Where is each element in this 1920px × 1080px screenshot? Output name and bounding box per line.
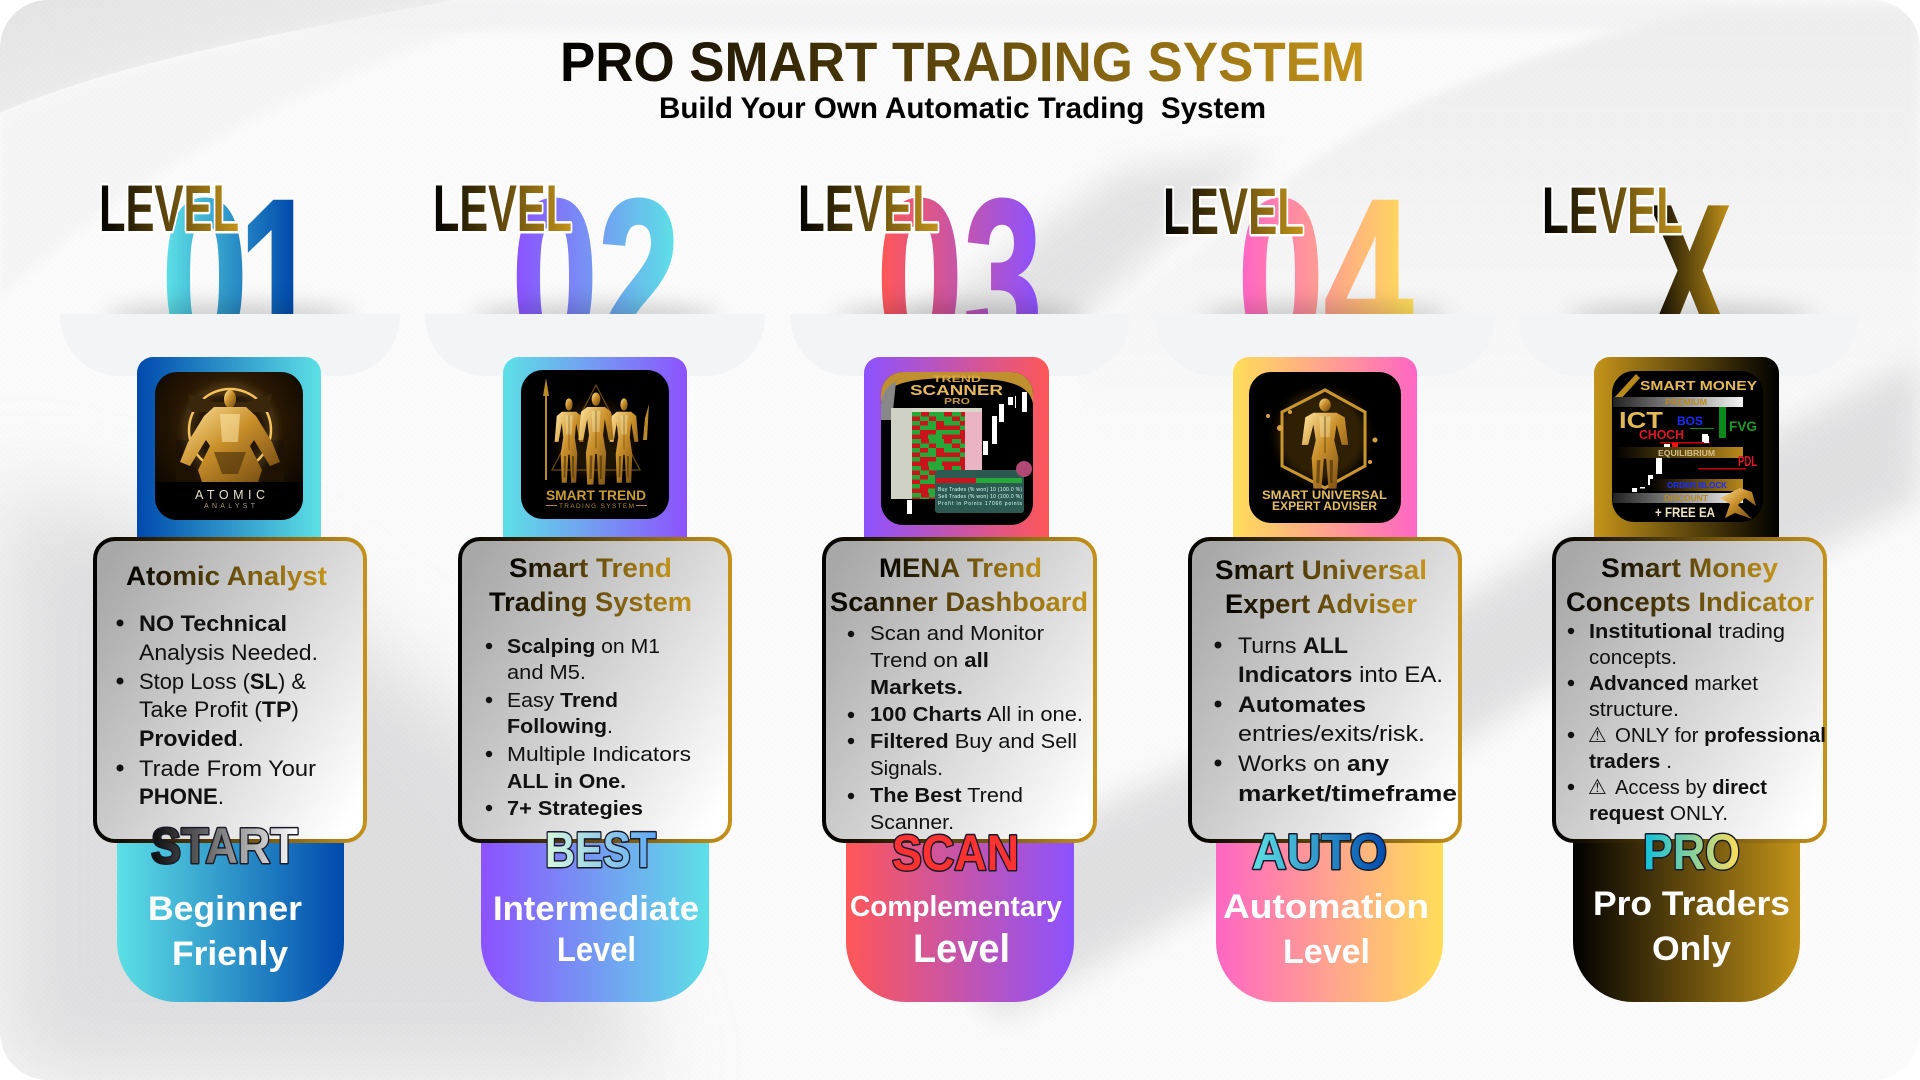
- level x column: [1544, 185, 1827, 1002]
- feature list: traders .: [1589, 751, 1672, 773]
- panel title: Concepts Indicator: [1566, 587, 1814, 617]
- pill: intermediate: Level: [557, 931, 636, 969]
- big number 03: [882, 198, 1038, 314]
- icon: smart money: FVG: [1729, 418, 1757, 434]
- feature list: 7+ Strategies: [507, 797, 643, 820]
- big number 01: [166, 198, 294, 314]
- panel title: MENA Trend: [879, 553, 1042, 583]
- level label: LEVEL: [798, 171, 939, 245]
- feature list: NO Technical: [139, 611, 287, 636]
- big number 04: 0: [1238, 154, 1324, 402]
- icon: smart universal: SMART UNIVERSAL: [1262, 490, 1387, 502]
- level 04 column: [1164, 186, 1462, 1002]
- big number 03: 0: [877, 154, 963, 402]
- feature list: Advanced market: [1589, 673, 1758, 695]
- panel title: [489, 553, 692, 617]
- big number 01: 1: [239, 154, 319, 402]
- feature list: ONLY for professional: [1615, 725, 1826, 747]
- shelf shadow: [838, 294, 1082, 314]
- level label: LEVEL: [99, 171, 239, 245]
- pill: intermediate: Intermediate: [493, 890, 699, 928]
- pill: complementary: Level: [913, 927, 1010, 971]
- panel: mena trend: [824, 539, 1095, 841]
- feature list: request ONLY.: [1589, 803, 1728, 825]
- panel title: Smart Universal: [1215, 555, 1427, 585]
- panel title: Atomic Analyst: [126, 561, 327, 591]
- feature list: PHONE.: [139, 784, 224, 809]
- shelf: [60, 314, 400, 376]
- tag: best: BEST: [545, 822, 656, 878]
- tag: auto: AUTO: [1252, 824, 1387, 880]
- big number 02: 2: [598, 154, 680, 402]
- image card: [864, 357, 1049, 557]
- icon: smart money: + FREE EA: [1655, 504, 1715, 520]
- panel: smart universal: [1190, 539, 1460, 841]
- big letter x: X: [1648, 165, 1731, 383]
- level label: LEVEL: [1542, 173, 1683, 247]
- feature list: Stop Loss (SL) &: [139, 669, 306, 694]
- pill: complementary: Complementary: [850, 891, 1062, 923]
- feature list: Multiple Indicators: [507, 743, 691, 766]
- panel: atomic analyst: [95, 539, 365, 841]
- pill: pro traders: [1573, 820, 1800, 1002]
- icon: trend scanner dashboard: Buy Trades (% won) 10 (100.0 %): [938, 487, 1022, 493]
- shelf shadow: [1569, 295, 1811, 314]
- feature list: ⚠: [1588, 775, 1607, 799]
- feature list: [486, 635, 691, 820]
- subtitle: Build Your Own Automatic Trading System: [659, 92, 1266, 125]
- icon: trend scanner dashboard: Profit in Points 17066 points: [938, 501, 1022, 507]
- pill: beginner friendly: Beginner: [148, 890, 302, 928]
- feature list: Works on any: [1238, 751, 1390, 776]
- panel title: [1215, 555, 1427, 619]
- feature list: 100 Charts All in one.: [870, 703, 1083, 726]
- icon: smart money: SMART MONEY: [1640, 378, 1757, 393]
- feature list: concepts.: [1589, 647, 1677, 669]
- level 03 column: [800, 186, 1097, 1002]
- big number 02: 0: [512, 154, 598, 402]
- feature list: [1214, 633, 1457, 806]
- feature list: Filtered Buy and Sell: [870, 730, 1077, 753]
- shelf shadow: [1202, 294, 1448, 314]
- feature list: Provided.: [139, 726, 244, 751]
- icon: smart trend: SMART TREND: [546, 487, 646, 503]
- image card: [137, 357, 321, 557]
- panel title: Smart Money: [1601, 553, 1778, 583]
- panel title: Expert Adviser: [1225, 589, 1417, 619]
- icon: atomic analyst: [155, 372, 303, 520]
- feature list: structure.: [1589, 699, 1679, 721]
- icon: smart universal: EXPERT ADVISER: [1272, 501, 1378, 513]
- feature list: [116, 611, 318, 809]
- icon: smart trend: [521, 370, 669, 519]
- feature list: Analysis Needed.: [139, 640, 318, 665]
- feature list: ⚠: [1588, 723, 1607, 747]
- shelf: [1518, 314, 1858, 376]
- level 01 column: [93, 183, 367, 1002]
- feature list: Institutional trading: [1589, 621, 1785, 643]
- pill: intermediate: [481, 820, 709, 1002]
- panel title: Smart Trend: [509, 553, 672, 583]
- icon: smart money: EQUILIBRIUM: [1658, 449, 1715, 458]
- feature list: Markets.: [870, 676, 963, 699]
- icon: smart universal: [1249, 372, 1401, 523]
- big number 02: [516, 198, 674, 314]
- level label: LEVEL: [1163, 174, 1304, 248]
- icon: smart money: CHOCH: [1639, 427, 1684, 442]
- icon: smart money: DISCOUNT: [1664, 494, 1708, 503]
- icon: smart money: ORDER BLOCK: [1667, 481, 1727, 490]
- icon: smart trend: TRADING SYSTEM: [559, 503, 634, 510]
- icon: trend scanner dashboard: Sell Trades (% won) 10 (100.0 %): [938, 494, 1022, 500]
- feature list: Trend on all: [870, 649, 989, 672]
- image card: [1594, 357, 1779, 557]
- feature list: entries/exits/risk.: [1238, 721, 1425, 746]
- feature list: Scanner.: [870, 811, 954, 834]
- feature list: Turns ALL: [1238, 633, 1348, 658]
- shelf shadow: [472, 294, 718, 314]
- tag: scan: SCAN: [892, 825, 1019, 881]
- feature list: Take Profit ( TP): [139, 697, 299, 722]
- panel title: Trading System: [489, 587, 692, 617]
- image card: [1233, 357, 1417, 557]
- pill: automation: Level: [1283, 933, 1370, 971]
- icon: trend scanner dashboard: PRO: [944, 396, 971, 406]
- big number 04: [1242, 198, 1414, 314]
- shelf: [425, 314, 765, 376]
- icon: atomic analyst: ATOMIC: [195, 488, 265, 502]
- feature list: Easy Trend: [507, 689, 618, 712]
- pill: complementary: [846, 820, 1074, 1002]
- feature list: The Best Trend: [870, 784, 1023, 807]
- shelf: [790, 314, 1130, 376]
- pill: beginner friendly: Frienly: [172, 935, 288, 973]
- feature list: Access by direct: [1615, 777, 1767, 799]
- panel title: [830, 553, 1088, 617]
- big number 01: 0: [162, 154, 248, 402]
- icon: trend scanner dashboard: TREND: [933, 374, 981, 385]
- icon: smart money: ICT: [1619, 407, 1663, 433]
- feature list: Trade From Your: [139, 756, 316, 781]
- feature list: [1568, 621, 1826, 825]
- icon: smart money: BOS: [1677, 414, 1703, 428]
- pill: pro traders: Pro Traders: [1593, 885, 1790, 923]
- icon: smart money: PDL: [1738, 453, 1757, 470]
- title: PRO SMART TRADING SYSTEM: [560, 30, 1365, 93]
- feature list: [848, 622, 1083, 834]
- icon: trend scanner dashboard: [881, 372, 1033, 525]
- pill: automation: [1216, 820, 1443, 1002]
- pill: pro traders: Only: [1652, 930, 1731, 968]
- panel title: Scanner Dashboard: [830, 587, 1088, 617]
- feature list: market/timeframe: [1238, 781, 1457, 806]
- panel: smart money: [1554, 539, 1826, 841]
- icon: smart money: [1612, 371, 1763, 522]
- feature list: ALL in One.: [507, 770, 626, 793]
- feature list: Indicators into EA.: [1238, 662, 1443, 687]
- feature list: Scalping on M1: [507, 635, 660, 658]
- feature list: Automates: [1238, 692, 1366, 717]
- shelf shadow: [108, 294, 352, 314]
- big number 04: 4: [1324, 154, 1413, 402]
- feature list: Signals.: [870, 757, 943, 780]
- shelf: [1155, 314, 1495, 376]
- tag: pro: PRO: [1643, 824, 1740, 880]
- icon: smart money: PREMIUM: [1665, 398, 1707, 407]
- image card: [503, 357, 687, 557]
- level label: LEVEL: [433, 171, 572, 245]
- feature list: and M5.: [507, 661, 586, 684]
- panel: smart trend: [460, 539, 730, 841]
- feature list: Scan and Monitor: [870, 622, 1044, 645]
- icon: atomic analyst: ANALYST: [204, 503, 256, 510]
- level 02 column: [436, 186, 732, 1002]
- pill: beginner friendly: [117, 820, 344, 1002]
- pill: automation: Automation: [1223, 888, 1429, 926]
- panel title: [1566, 553, 1814, 617]
- icon: trend scanner dashboard: SCANNER: [910, 382, 1003, 399]
- feature list: Following.: [507, 715, 613, 738]
- big number 03: 3: [964, 154, 1042, 402]
- tag: start: START: [151, 818, 298, 874]
